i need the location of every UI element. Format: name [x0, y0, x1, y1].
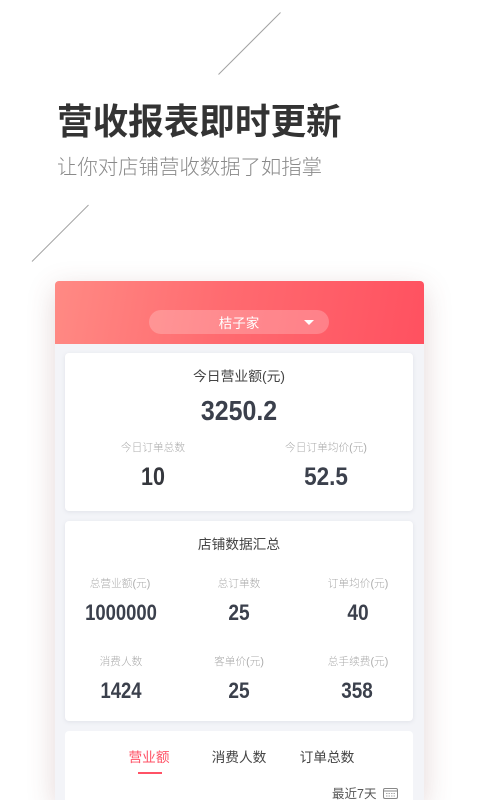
- total revenue value: 1000000: [85, 600, 157, 625]
- dropdown arrow: [304, 320, 314, 325]
- today's average order value: 52.5: [304, 463, 348, 491]
- today's orders value: 10: [141, 463, 165, 491]
- tab: customers: 消费人数: [212, 750, 266, 765]
- panel: today's revenue: [65, 353, 413, 511]
- tab: orders: 订单总数: [300, 750, 354, 765]
- heading: today's revenue: 今日营业额(元): [193, 369, 285, 384]
- panel: phone screen: [55, 281, 424, 800]
- today's revenue value: 3250.2: [201, 395, 277, 426]
- order average value: 40: [347, 600, 369, 625]
- title: 营收报表即时更新: [57, 102, 342, 142]
- label: per customer price: 客单价(元): [214, 656, 264, 668]
- label: total revenue: 总营业额(元): [90, 578, 150, 590]
- panel: store summary: [65, 521, 413, 721]
- store name: 桔子家: [219, 316, 259, 331]
- customers value: 1424: [100, 678, 142, 703]
- total orders value: 25: [228, 600, 250, 625]
- total fees value: 358: [341, 678, 373, 703]
- label: total orders: 总订单数: [218, 578, 260, 590]
- panel: trend tabs: [65, 731, 413, 800]
- decorative diagonal lines: [32, 12, 281, 262]
- per customer price value: 25: [228, 678, 250, 703]
- label: customers: 消费人数: [100, 656, 142, 668]
- icon: calendar: [383, 788, 398, 799]
- tab underline: [138, 772, 162, 774]
- label: today's orders: 今日订单总数: [121, 442, 185, 454]
- heading: store summary: 店铺数据汇总: [198, 537, 280, 552]
- store selector: [149, 310, 329, 334]
- panel: red header: [55, 281, 424, 344]
- label: order average: 订单均价(元): [328, 578, 388, 590]
- label: today's average order: 今日订单均价(元): [285, 442, 367, 454]
- label: total fees: 总手续费(元): [328, 656, 388, 668]
- subtitle: 让你对店铺营收数据了如指掌: [57, 157, 322, 179]
- tab: revenue active: 营业额: [128, 750, 170, 765]
